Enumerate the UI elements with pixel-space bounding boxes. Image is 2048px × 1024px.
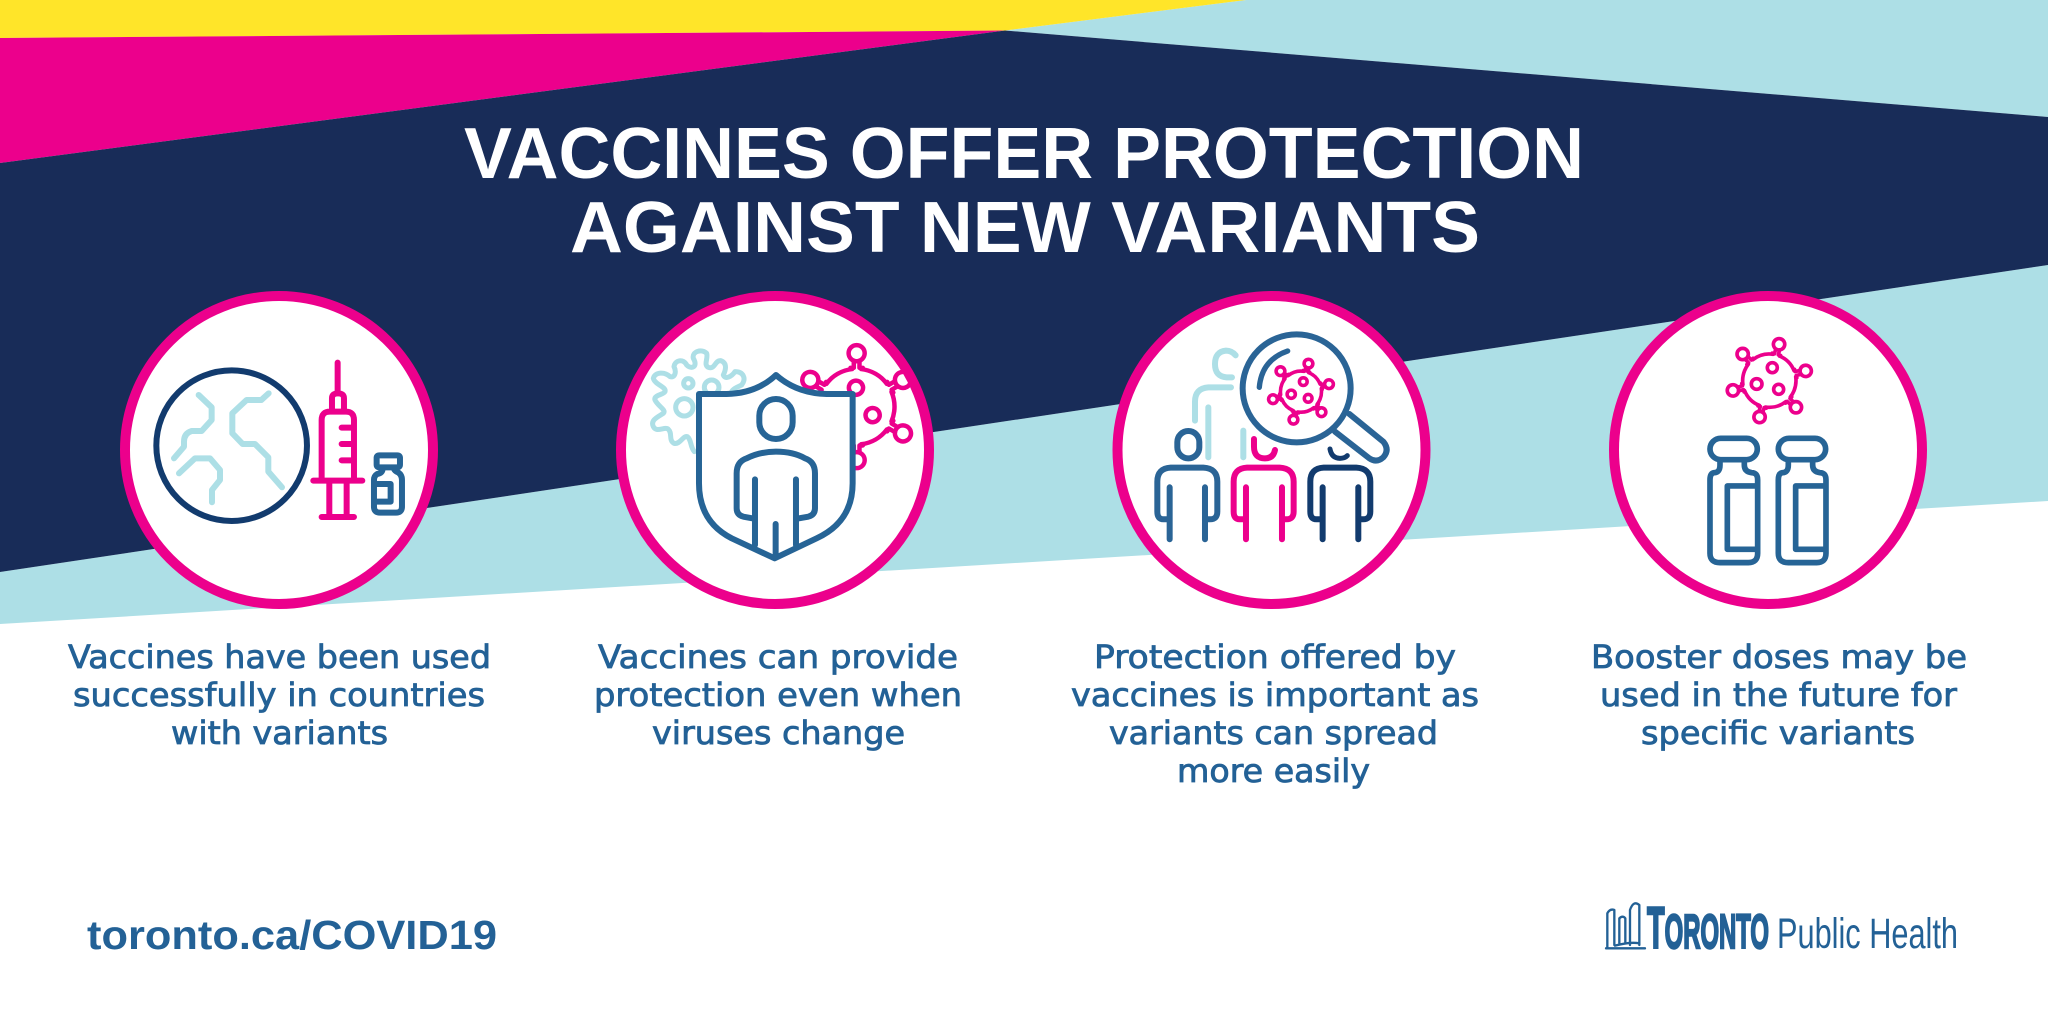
icon: right vial: [1778, 438, 1826, 563]
footer url: toronto.ca/COVID19: [87, 912, 497, 958]
logo wordmark: Toronto: TORONTO: [1647, 896, 1769, 961]
icon: blue person: [1157, 431, 1217, 539]
logo wordmark: Public Health: Public Health: [1777, 910, 1958, 958]
caption 1: with variants: [171, 714, 388, 752]
icon: navy person: [1310, 449, 1370, 539]
icon: city hall: [1606, 903, 1645, 948]
icon: pink person: [1234, 439, 1294, 539]
circle badge 1: [125, 296, 433, 604]
title: AGAINST NEW VARIANTS: [570, 187, 1480, 268]
icon: magnifying glass: [1243, 334, 1387, 461]
title: [464, 113, 1584, 268]
caption 4: specific variants: [1641, 714, 1915, 752]
icon: people and magnifying glass: [1157, 334, 1387, 539]
caption 2: Vaccines can provide: [598, 638, 958, 676]
circle badge 4: [1614, 296, 1922, 604]
icon: pink virus: [781, 331, 932, 482]
caption 3: vaccines is important as: [1071, 676, 1479, 714]
icon: globe, syringe and vial: [156, 363, 402, 521]
background band: yellow: [0, 0, 1246, 38]
background band: pink: [0, 30, 1005, 163]
icon: virus above two vials: [1710, 337, 1826, 563]
icon: virus: [1726, 337, 1813, 424]
background band: navy: [0, 30, 2048, 572]
panel: used successfully in countries: [68, 296, 491, 752]
icon: light blue virus: [653, 351, 744, 452]
panel: booster doses: [1591, 296, 1967, 752]
icon: globe: [156, 370, 307, 521]
icon: syringe: [313, 363, 362, 517]
caption 2: viruses change: [652, 714, 905, 752]
caption 4: Booster doses may be: [1591, 638, 1967, 676]
icon: shield: [699, 375, 853, 558]
caption 2: protection even when: [594, 676, 962, 714]
caption 3: more easily: [1177, 752, 1370, 790]
background band: light blue top right: [1005, 0, 2048, 117]
background band: light blue lower: [0, 265, 2048, 624]
caption 3: variants can spread: [1109, 714, 1438, 752]
icon: left vial: [1710, 438, 1758, 563]
caption 3: Protection offered by: [1094, 638, 1456, 676]
circle badge 3: [1118, 296, 1426, 604]
caption 1: Vaccines have been used: [68, 638, 491, 676]
icon: light blue person: [1195, 351, 1243, 457]
icon: shield, person and viruses: [653, 331, 932, 558]
panel: protection when viruses change: [594, 296, 962, 752]
title: VACCINES OFFER PROTECTION: [464, 113, 1584, 194]
circle badge 2: [621, 296, 929, 604]
caption 3: [1071, 638, 1479, 790]
caption 1: successfully in countries: [73, 676, 485, 714]
icon: vial: [374, 455, 402, 513]
logo: Toronto Public Health: [1606, 896, 1958, 961]
icon: person: [737, 399, 815, 557]
caption 2: [594, 638, 962, 752]
icon: virus under glass: [1268, 358, 1334, 425]
panel: variants can spread more easily: [1071, 296, 1479, 790]
caption 1: [68, 638, 491, 752]
caption 4: used in the future for: [1600, 676, 1958, 714]
caption 4: [1591, 638, 1967, 752]
